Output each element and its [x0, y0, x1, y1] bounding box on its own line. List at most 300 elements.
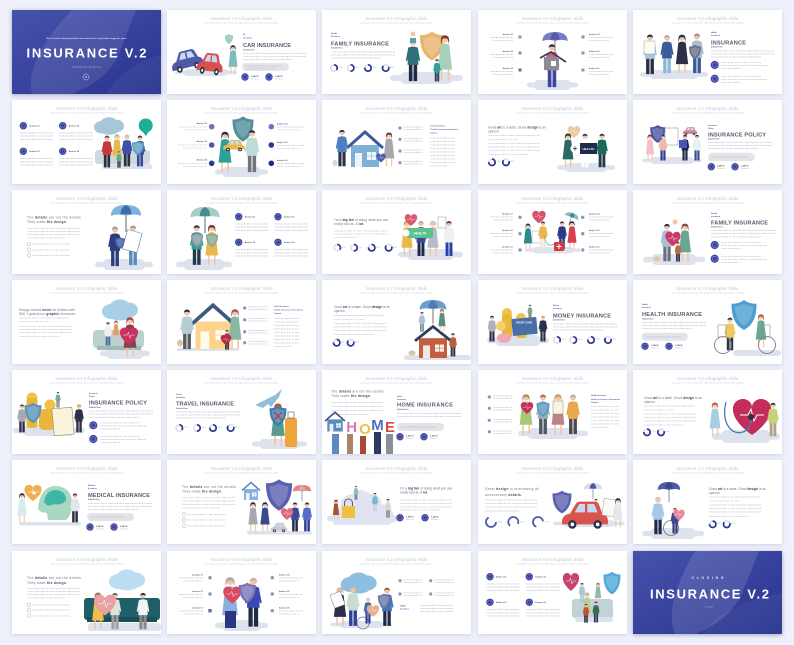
checklist: Lorem ipsum dolor sit amet consectetur [32, 609, 70, 612]
illustration: family on brown house under umbrella [404, 300, 471, 360]
quote [709, 487, 766, 495]
panel: blue house [322, 100, 471, 184]
bottom text: Lorem ipsum dolor sit amet consectetur [420, 607, 453, 610]
analyses grid: Lorem ipsum dolor sit amet consectetur [235, 248, 268, 251]
donut charts [331, 64, 394, 72]
text block: Lorem ipsum dolor sit amet consectetur adipiscing elit sed do eiusmod [711, 232, 775, 235]
list [488, 394, 512, 435]
right column text: Lorem ipsum dolor sit amet [430, 144, 455, 146]
body text: Lorem ipsum dolor sit amet consectetur adipiscing elit [331, 409, 383, 412]
right column text: Lorem ipsum dolor sit amet [274, 324, 299, 327]
body text: Lorem ipsum dolor sit amet consectetur adipiscing elit [709, 504, 761, 506]
body text: Lorem ipsum dolor sit amet consectetur adipiscing elit [488, 149, 540, 152]
list: Lorem ipsum dolor sit [493, 432, 512, 435]
left analysis list: Lorem ipsum dolor sit amet [178, 144, 207, 146]
panel: details with umbrella: Insurance V.2 Infographic Slide [56, 196, 118, 201]
list: Lorem ipsum dolor sit [404, 137, 423, 140]
stats [641, 343, 684, 350]
body text: Lorem ipsum dolor sit amet consectetur adipiscing elit [27, 587, 80, 590]
analyses grid: Lorem ipsum dolor sit amet consectetur [486, 589, 520, 592]
text block: MEDICAL INSURANCE [88, 493, 150, 499]
illustration: couple with shield and car [215, 116, 268, 177]
quote: The details are not the details. [331, 390, 385, 394]
stats: Revenue [431, 519, 440, 521]
analyses grid: Lorem ipsum dolor sit amet consectetur [274, 229, 308, 232]
illustration: medical head and doctors [17, 485, 81, 526]
illustration: health banner: HEALTH [583, 147, 594, 151]
analyses grid: Lorem ipsum dolor sit amet consectetur [59, 131, 93, 134]
body text: Lorem ipsum dolor sit amet consectetur adipiscing elit [709, 507, 761, 510]
donut charts [486, 515, 549, 529]
text block: Lorem ipsum dolor sit amet consectetur adipiscing elit sed do eiusmod [89, 410, 153, 412]
analyses grid: Lorem ipsum dolor sit amet consectetur [235, 222, 268, 225]
illustration: trio on teal sofa with cloud [84, 570, 161, 631]
left analysis list: Analysis 03 [197, 158, 207, 162]
analyses grid: Analysis 04 [284, 241, 295, 244]
right column text: Lorem ipsum dolor sit amet [274, 328, 299, 330]
list: Lorem ipsum dolor sit [434, 581, 454, 584]
text block: Lorem ipsum dolor sit amet consectetur adipiscing elit [553, 328, 603, 332]
left analysis list: Analysis 01 [192, 574, 203, 576]
panel: four analyses with family sofa [12, 100, 161, 184]
analyses grid: Lorem ipsum dolor sit amet consectetur [486, 615, 520, 618]
text block: Subtitle Here [708, 138, 720, 140]
stats: Revenue [675, 348, 684, 350]
right analysis list: Lorem ipsum dolor sit amet [589, 53, 613, 56]
text block: Insurance [243, 38, 252, 40]
left analysis list: Lorem ipsum dolor sit amet [179, 576, 203, 580]
analyses grid: Analysis 01 [29, 124, 40, 127]
callout pill [397, 423, 444, 431]
text block: HEALTH INSURANCE [642, 312, 702, 318]
analyses grid: Lorem ipsum dolor sit amet consectetur [235, 255, 268, 258]
stats: Revenue [120, 528, 129, 530]
body text: Lorem ipsum dolor sit amet [488, 138, 518, 141]
left analysis list: Lorem ipsum dolor sit amet [178, 162, 207, 165]
bullet list with badges: Lorem ipsum dolor sit [721, 81, 741, 84]
checklist: Lorem ipsum dolor sit amet consectetur [32, 603, 70, 606]
markers [209, 124, 274, 166]
analyses grid: Analysis 02 [284, 215, 294, 218]
bottom text: Insurance [400, 608, 409, 610]
text block: Insurance [553, 308, 562, 310]
right analysis list: Analysis 04 [277, 122, 288, 126]
text block: Lorem ipsum dolor sit amet consectetur adipiscing elit sed do eiusmod [397, 415, 461, 418]
body text: Lorem ipsum dolor sit amet consectetur [644, 424, 684, 426]
body text: Lorem ipsum dolor sit amet [709, 500, 739, 502]
right analysis list: Analysis 04 [589, 212, 600, 215]
right column text: Credit Insurance [274, 305, 289, 308]
list: Lorem ipsum dolor sit [248, 340, 268, 343]
panel: care group: Lorem ipsum dolor sit amet consectetur adipiscing elit sed do eiusmod tempor incididunt [360, 562, 434, 566]
illustration: coins and credit card: CREDIT CARD [516, 322, 533, 324]
analyses grid: Lorem ipsum dolor sit amet consectetur [20, 164, 53, 167]
right analysis list: Analysis 06 [589, 67, 599, 70]
panel: couple with shield, four analyses: Insurance V.2 Infographic Slide [210, 196, 273, 201]
stats: 2,000 $ [717, 166, 725, 168]
body text: Lorem ipsum dolor sit amet consectetur adipiscing elit [331, 405, 383, 408]
analyses grid: Lorem ipsum dolor sit amet consectetur [274, 255, 308, 258]
body text: Lorem ipsum dolor sit amet consectetur adipiscing elit [19, 328, 72, 331]
panel: details with umbrella: Lorem ipsum dolor sit amet consectetur adipiscing elit sed do eiusmod tempor incididunt [50, 202, 124, 204]
right analysis list: Lorem ipsum dolor sit [589, 251, 609, 254]
illustration: medical team [524, 211, 582, 253]
list [243, 306, 268, 346]
quote: really bad at. A lot. [400, 490, 428, 494]
body text: Lorem ipsum dolor sit amet consectetur adipiscing elit [400, 498, 452, 502]
text block: FAMILY INSURANCE [711, 220, 768, 226]
text block: Lorem ipsum dolor sit amet consectetur adipiscing elit sed do eiusmod [243, 55, 306, 58]
right column text: Lorem ipsum dolor sit amet [430, 150, 455, 154]
analyses grid: Lorem ipsum dolor sit amet consectetur [59, 164, 93, 167]
quote: Good art is a taste. Good design is an [644, 396, 702, 400]
stats: 1,200 $ [275, 76, 283, 78]
illustration: wheelchair users and shield [714, 300, 781, 356]
text block: 05 [243, 34, 245, 36]
body text: Lorem ipsum dolor sit amet consectetur [27, 596, 65, 600]
list: Lorem ipsum dolor sit [493, 397, 512, 400]
right column text: Lorem ipsum dolor [274, 346, 292, 348]
quote [334, 218, 388, 226]
text block: Health [642, 303, 649, 306]
panel: medical insurance: Lorem ipsum dolor sit amet consectetur adipiscing elit sed do eiusmod tempor incididunt [50, 472, 124, 474]
left analysis list: Lorem ipsum dolor sit [183, 128, 207, 132]
right column text [430, 124, 459, 168]
donut charts: 80% [510, 161, 515, 163]
quote: opinion. [644, 400, 656, 404]
list: Lorem ipsum dolor sit [404, 581, 423, 584]
right column text: Lorem ipsum dolor sit amet [591, 416, 619, 418]
text block [397, 396, 461, 418]
donut charts: 80% [355, 342, 359, 344]
right analysis list: Lorem ipsum dolor sit amet [277, 144, 304, 147]
body text: Lorem ipsum dolor sit amet consectetur adipiscing elit [182, 500, 235, 502]
text block: Health [711, 31, 718, 34]
panel: money insurance: Insurance V.2 Infographic Slide [522, 286, 584, 291]
panel: blue house: Insurance V.2 Infographic Slide [366, 106, 428, 111]
text block: Lorem ipsum dolor sit amet consectetur adipiscing elit sed do eiusmod [88, 505, 152, 508]
quote: Design should never be hidden with [19, 308, 75, 312]
checklist: Lorem ipsum dolor sit amet consectetur [187, 513, 225, 516]
illustration: hands holding HOME letters: O [359, 421, 371, 438]
illustration: seniors and health banner: HEALTH [414, 232, 427, 236]
text block: Lorem ipsum dolor sit amet consectetur adipiscing elit sed do eiusmod [642, 321, 706, 324]
analyses grid: Lorem ipsum dolor sit amet consectetur [20, 135, 53, 138]
panel: insurance group: Lorem ipsum dolor sit amet consectetur adipiscing elit sed do eiusmod tempor incididunt [671, 22, 745, 24]
analyses grid: Analysis 02 [535, 575, 546, 578]
illustration: hands holding HOME letters [325, 412, 395, 454]
left analysis list: Lorem ipsum dolor sit [183, 165, 207, 168]
bullet list with badges: Lorem ipsum dolor sit amet consectetur adipiscing [721, 64, 767, 67]
stats: Revenue [275, 78, 284, 80]
right column text: Lorem ipsum dolor sit amet [274, 317, 299, 320]
panel: family insurance with donuts: Lorem ipsum dolor sit amet consectetur adipiscing elit sed do eiusmod tempor incididunt [360, 22, 434, 24]
panel: care group: Insurance V.2 Infographic Slide [366, 557, 428, 562]
body text [27, 227, 80, 240]
text block: Insurance [89, 393, 98, 395]
donut charts: 50% [717, 523, 721, 525]
right analysis list: Analysis 06 [277, 159, 287, 162]
left analysis list: Analysis 03 [502, 245, 513, 248]
text block: Insurance [88, 488, 97, 490]
callout pill: Lorem ipsum dolor sit amet consectetur [401, 426, 436, 428]
bullet list with badges: Lorem ipsum dolor sit [721, 261, 741, 264]
illustration: traveller with plane [252, 389, 307, 449]
stats [708, 163, 750, 170]
right analysis list: Lorem ipsum dolor sit [589, 218, 609, 221]
panel: family insurance with heart: Lorem ipsum dolor sit amet consectetur adipiscing elit sed do eiusmod tempor incididunt [671, 202, 745, 204]
body text: Lorem ipsum dolor sit amet consectetur adipiscing elit [644, 404, 694, 408]
quote [485, 487, 539, 497]
bullet list with badges: Lorem ipsum dolor sit amet consectetur adipiscing [721, 244, 767, 247]
panel: big fan with cloud lock [322, 460, 471, 544]
quote [488, 126, 546, 134]
right analysis list [279, 574, 303, 616]
right analysis list: Lorem ipsum dolor sit amet [277, 126, 304, 128]
analyses grid: Lorem ipsum dolor sit amet consectetur [235, 251, 268, 254]
body text: Lorem ipsum dolor sit amet consectetur adipiscing elit [27, 590, 80, 593]
body text: Lorem ipsum dolor sit amet consectetur adipiscing elit [334, 322, 386, 325]
text block: Lorem ipsum dolor sit amet consectetur adipiscing elit [711, 56, 761, 58]
text block: Subtitle Here [176, 407, 188, 410]
right analysis list: Lorem ipsum dolor sit amet [589, 232, 613, 235]
donut charts [334, 244, 397, 252]
stats: 1,200 $ [120, 526, 128, 528]
body text: Lorem ipsum dolor sit amet [19, 320, 49, 323]
text block: Lorem ipsum dolor sit amet consectetur adipiscing elit [243, 58, 293, 61]
body text [182, 496, 235, 510]
text block [176, 394, 240, 420]
list: Lorem ipsum dolor sit [404, 592, 423, 594]
analyses grid: Lorem ipsum dolor sit amet consectetur [526, 615, 560, 618]
callout pill [87, 513, 134, 521]
text block: Lorem ipsum dolor sit amet consectetur adipiscing elit sed do eiusmod [176, 414, 240, 416]
list: Lorem ipsum dolor sit [404, 148, 423, 152]
analyses grid: Lorem ipsum dolor sit amet consectetur [486, 608, 520, 611]
left analysis list: Lorem ipsum dolor sit [493, 39, 513, 42]
panel: good art with brown house: Insurance V.2 Infographic Slide [366, 286, 428, 291]
text block: FAMILY INSURANCE [331, 42, 389, 48]
right column text: Lorem ipsum dolor sit amet [430, 161, 455, 164]
bullet list with badges [89, 421, 146, 444]
panel: couple with shield, four analyses [167, 190, 316, 274]
quote: The details are not the details. [182, 485, 237, 489]
quote: Still 't gratuitous graphic elements. [19, 312, 76, 316]
text block: MONEY INSURANCE [553, 314, 611, 320]
quote [19, 308, 76, 316]
right analysis list [277, 122, 304, 168]
body text [709, 496, 761, 518]
right column text: Credit Insurance Information [274, 308, 304, 312]
text block: Subtitle Here [397, 408, 409, 411]
text block: Lorem ipsum dolor sit amet consectetur adipiscing elit sed do eiusmod [642, 324, 706, 327]
panel: big fan with health banner: Lorem ipsum dolor sit amet consectetur adipiscing elit sed do eiusmod tempor incididunt [360, 202, 434, 204]
panel: home insurance: Insurance V.2 Infographic Slide [366, 376, 428, 381]
list: Lorem ipsum dolor sit [404, 140, 423, 142]
donut charts: 50% [498, 522, 502, 524]
quote: The details are not the details. [27, 576, 82, 580]
right analysis list: Lorem ipsum dolor sit [277, 165, 301, 168]
analyses grid: Analysis 01 [496, 575, 506, 578]
right column text: Lorem ipsum dolor sit amet [430, 136, 455, 140]
right analysis list: Analysis 04 [279, 574, 290, 576]
panel: insurance policy with coins: Lorem ipsum dolor sit amet consectetur adipiscing elit sed do eiusmod tempor incididunt [50, 382, 124, 384]
panel: car insurance: Insurance V.2 Infographic Slide [210, 16, 273, 21]
quote: Good art is a taste. Good design is an [488, 126, 546, 130]
analyses grid: Lorem ipsum dolor sit amet consectetur [20, 138, 53, 141]
text block: Lorem ipsum dolor sit amet consectetur adipiscing elit sed do eiusmod [397, 412, 461, 415]
right column text: Lorem ipsum dolor sit amet [430, 147, 455, 150]
text block [708, 125, 772, 150]
quote: They make the design. [331, 394, 371, 398]
panel: design should never be hidden: Insurance V.2 Infographic Slide [56, 286, 118, 291]
panel: four analyses with family sofa: Lorem ipsum dolor sit amet consectetur adipiscing elit sed do eiusmod tempor incididunt [50, 112, 124, 114]
list: Lorem ipsum dolor sit [493, 430, 512, 432]
panel: insurance policy with pill: Insurance V.2 Infographic Slide [676, 106, 739, 111]
panel: medical team three and three: Lorem ipsum dolor sit amet consectetur adipiscing elit sed do eiusmod tempor incididunt [516, 202, 590, 204]
panel: insurance group: Insurance V.2 Infographic Slide [676, 16, 739, 21]
panel: health banner [478, 100, 627, 184]
analyses grid: Lorem ipsum dolor sit amet consectetur [526, 589, 560, 592]
analyses grid: Lorem ipsum dolor sit amet consectetur [486, 582, 520, 585]
right analysis list: Lorem ipsum dolor sit amet [589, 36, 613, 39]
illustration: cloud with lock [327, 486, 399, 525]
list: Lorem ipsum dolor sit [404, 162, 423, 166]
callout pill: Lorem ipsum dolor sit amet consectetur [91, 516, 126, 518]
text block: Subtitle Here [243, 48, 255, 52]
left analysis list [179, 574, 203, 616]
analyses grid: Lorem ipsum dolor sit amet consectetur [235, 229, 268, 232]
caption: Thanks [705, 606, 713, 608]
left analysis list: Lorem ipsum dolor sit amet [490, 215, 513, 218]
bullet list with badges [711, 61, 767, 84]
panel: travel insurance: Lorem ipsum dolor sit amet consectetur adipiscing elit sed do eiusmod tempor incididunt [205, 382, 279, 384]
text block: Lorem ipsum dolor sit amet consectetur adipiscing elit [89, 416, 139, 419]
body text: Lorem ipsum dolor sit amet consectetur adipiscing elit [27, 230, 80, 233]
right column text: Content [591, 401, 599, 404]
left analysis list: Lorem ipsum dolor sit amet [490, 248, 513, 251]
text block: Lorem ipsum dolor sit amet consectetur adipiscing elit sed do eiusmod [711, 52, 774, 56]
panel: insurance policy with pill [633, 100, 782, 184]
list: Lorem ipsum dolor sit [434, 594, 454, 597]
body text: Lorem ipsum dolor sit amet consectetur [19, 335, 59, 338]
body text [488, 134, 540, 156]
right column text: Lorem ipsum dolor sit amet [591, 419, 619, 422]
analyses grid: Lorem ipsum dolor sit amet consectetur [59, 138, 93, 141]
bullet list with badges [711, 241, 767, 264]
donut charts [710, 520, 735, 528]
bullet list with badges: Lorem ipsum dolor sit amet consectetur [721, 241, 761, 244]
quote [27, 216, 82, 224]
analyses grid: Lorem ipsum dolor sit amet consectetur [20, 157, 53, 160]
right column text: Lorem ipsum dolor sit amet [274, 338, 299, 341]
analyses grid: Analysis 04 [69, 150, 80, 153]
text block [711, 213, 775, 238]
analyses grid: Lorem ipsum dolor sit amet consectetur [526, 586, 560, 589]
text block: Lorem ipsum dolor sit amet consectetur adipiscing elit sed do eiusmod [553, 322, 617, 326]
stats: 1,000 $ [96, 526, 104, 528]
analyses grid: Analysis 03 [245, 241, 255, 244]
panel: yellow house: Insurance V.2 Infographic Slide [210, 286, 273, 291]
right column text: Content [274, 312, 282, 315]
text block: Medical [88, 485, 95, 487]
panel: medical team three and three: Insurance V.2 Infographic Slide [522, 196, 584, 201]
text block: Subtitle Here [331, 46, 343, 50]
analyses grid: Lorem ipsum dolor sit amet consectetur [274, 248, 308, 251]
donut charts: 50% [341, 342, 345, 344]
right column text: Lorem ipsum dolor sit amet [274, 320, 299, 324]
body text: Lorem ipsum dolor sit amet consectetur adipiscing elit [400, 502, 452, 505]
body text [644, 404, 696, 426]
stats: 1,200 $ [431, 516, 439, 518]
left analysis list: Lorem ipsum dolor sit amet [490, 36, 513, 39]
analyses grid: Lorem ipsum dolor sit amet consectetur [486, 586, 520, 589]
donut charts: 75% [218, 427, 222, 429]
right analysis list: Analysis 04 [589, 33, 600, 36]
illustration: car with shield and umbrella [552, 483, 625, 529]
bullet list with badges: Lorem ipsum dolor sit amet consectetur [100, 421, 140, 424]
body text: Lorem ipsum dolor sit amet consectetur adipiscing elit [709, 496, 759, 498]
panel: health banner: Lorem ipsum dolor sit amet consectetur adipiscing elit sed do eiusmod tempor incididunt [516, 112, 590, 114]
caption: Company name and year here [72, 66, 101, 68]
panel: title slide [12, 10, 161, 94]
stats: Revenue [251, 78, 260, 80]
right analysis list: Lorem ipsum dolor sit [589, 39, 609, 42]
illustration: family with heart [643, 220, 705, 265]
left analysis list: Lorem ipsum dolor sit [183, 580, 203, 582]
body text [334, 230, 388, 239]
panel: health banner: Insurance V.2 Infographic Slide [522, 106, 584, 111]
analyses grid: Lorem ipsum dolor sit amet consectetur [274, 222, 308, 225]
illustration: yellow house and family [177, 305, 241, 351]
panel: yellow house [167, 280, 316, 364]
left analysis list: Lorem ipsum dolor sit amet [179, 593, 203, 596]
quote: Great design is eliminating all [485, 487, 539, 491]
stats: 1,000 $ [251, 76, 259, 78]
stats: 1,200 $ [675, 345, 683, 347]
body text: Lorem ipsum dolor sit amet consectetur adipiscing elit [334, 326, 386, 328]
right analysis list: Lorem ipsum dolor sit amet [589, 70, 613, 73]
illustration: group with wheelchair [330, 572, 394, 629]
panel: details with big shield: Lorem ipsum dolor sit amet consectetur adipiscing elit sed do eiusmod tempor incididunt [205, 472, 279, 474]
stats: 1,200 $ [430, 436, 438, 438]
panel: car protection three and three: Lorem ipsum dolor sit amet consectetur adipiscing elit sed do eiusmod tempor incididunt [205, 112, 279, 114]
right column text: Health Insurance [591, 394, 606, 397]
bullet list with badges: Lorem ipsum dolor sit amet consectetur adipiscing [721, 258, 767, 261]
right column text: Health Insurance Information [591, 398, 621, 401]
left analysis list: Analysis 03 [192, 606, 203, 610]
text block: Family [331, 33, 338, 35]
panel: insurance policy with coins: Insurance V.2 Infographic Slide [56, 376, 118, 381]
bullet list with badges: Lorem ipsum dolor sit [100, 441, 120, 444]
analyses grid: Analysis 02 [69, 124, 79, 127]
analyses grid: Lorem ipsum dolor sit amet consectetur [274, 226, 308, 229]
donut charts [489, 158, 515, 166]
text block: Insurance [711, 35, 720, 37]
analyses grid: Lorem ipsum dolor sit amet consectetur [526, 608, 560, 611]
analyses grid: Lorem ipsum dolor sit amet consectetur [20, 160, 53, 163]
panel: money insurance: Lorem ipsum dolor sit amet consectetur adipiscing elit sed do eiusmod tempor incididunt [516, 292, 590, 294]
left analysis list: Analysis 02 [197, 140, 207, 143]
body text: Lorem ipsum dolor sit amet [334, 318, 364, 321]
right column text: Lorem ipsum dolor sit amet [430, 140, 455, 143]
callout pill: Lorem ipsum dolor sit amet consectetur [246, 64, 282, 68]
text block: HOME INSURANCE [397, 403, 453, 409]
list: Lorem ipsum dolor sit [493, 406, 512, 409]
text block: Insurance [711, 216, 720, 218]
text block: Subtitle Here [89, 406, 101, 409]
panel: seniors with heart and shield: Insurance V.2 Infographic Slide [210, 557, 273, 562]
